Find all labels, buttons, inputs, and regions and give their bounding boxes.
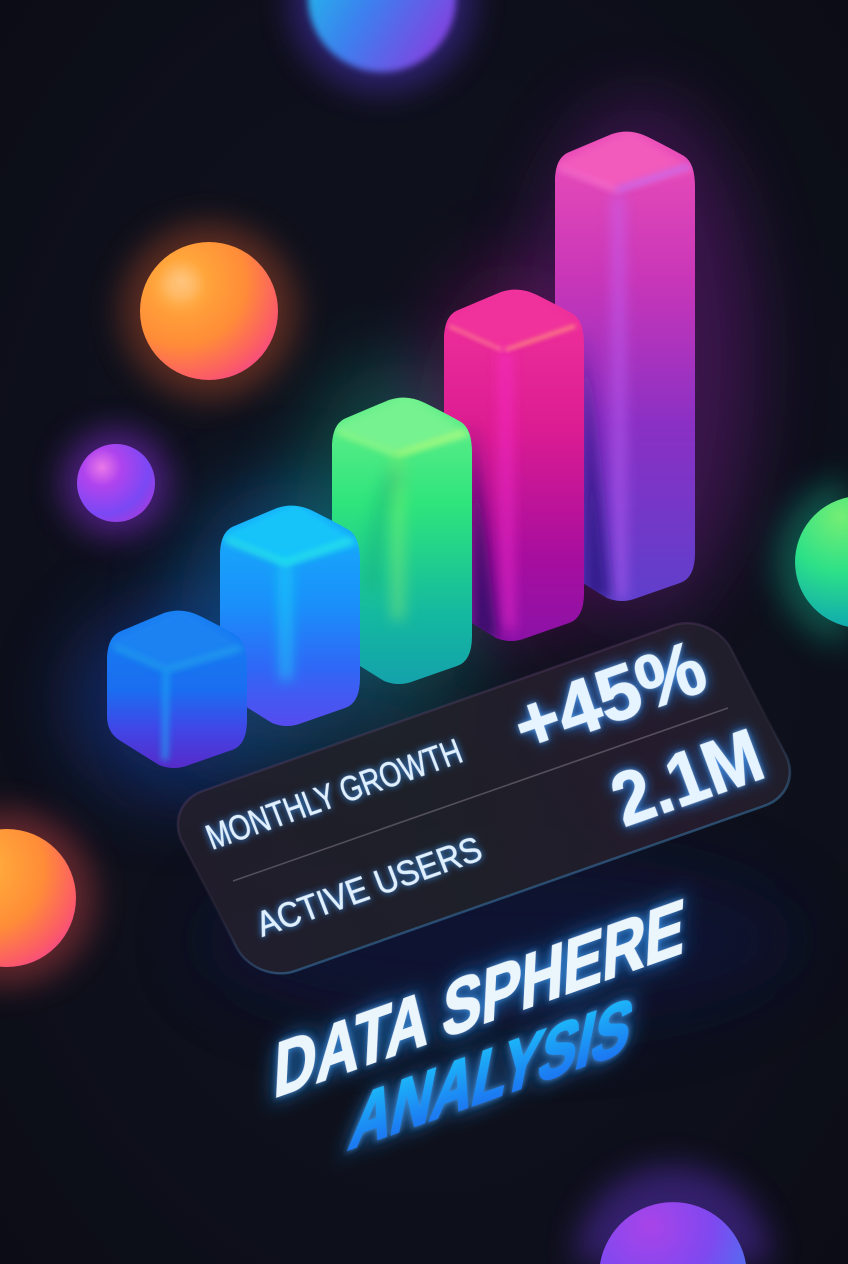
bar 4: hot pink <box>440 282 588 647</box>
sphere: small purple <box>62 429 170 537</box>
bar 5: magenta-purple <box>550 125 700 610</box>
panel: stats card <box>163 612 805 985</box>
card background <box>163 612 805 985</box>
bar 1: blue cube <box>107 610 247 768</box>
sphere: bottom purple <box>575 1166 771 1264</box>
stat value: 2.1M: 2.1M <box>600 712 774 842</box>
title: analysis: ANALYSIS <box>344 981 640 1167</box>
sphere: green right edge <box>776 478 848 646</box>
ambient glows behind the chart <box>70 100 800 1030</box>
bar 3: green-teal <box>328 392 476 690</box>
sphere: top blue-purple <box>290 0 474 92</box>
stat label: monthly growth: MONTHLY GROWTH <box>201 732 468 857</box>
bar 2: cyan-blue <box>220 506 360 726</box>
sphere: orange <box>121 223 297 399</box>
sphere: orange left edge <box>0 810 95 986</box>
title: data sphere: DATA SPHERE <box>272 881 687 1115</box>
bar chart <box>102 125 700 775</box>
stat label: active users: ACTIVE USERS <box>251 830 487 944</box>
stat value: +45%: +45% <box>503 624 716 770</box>
